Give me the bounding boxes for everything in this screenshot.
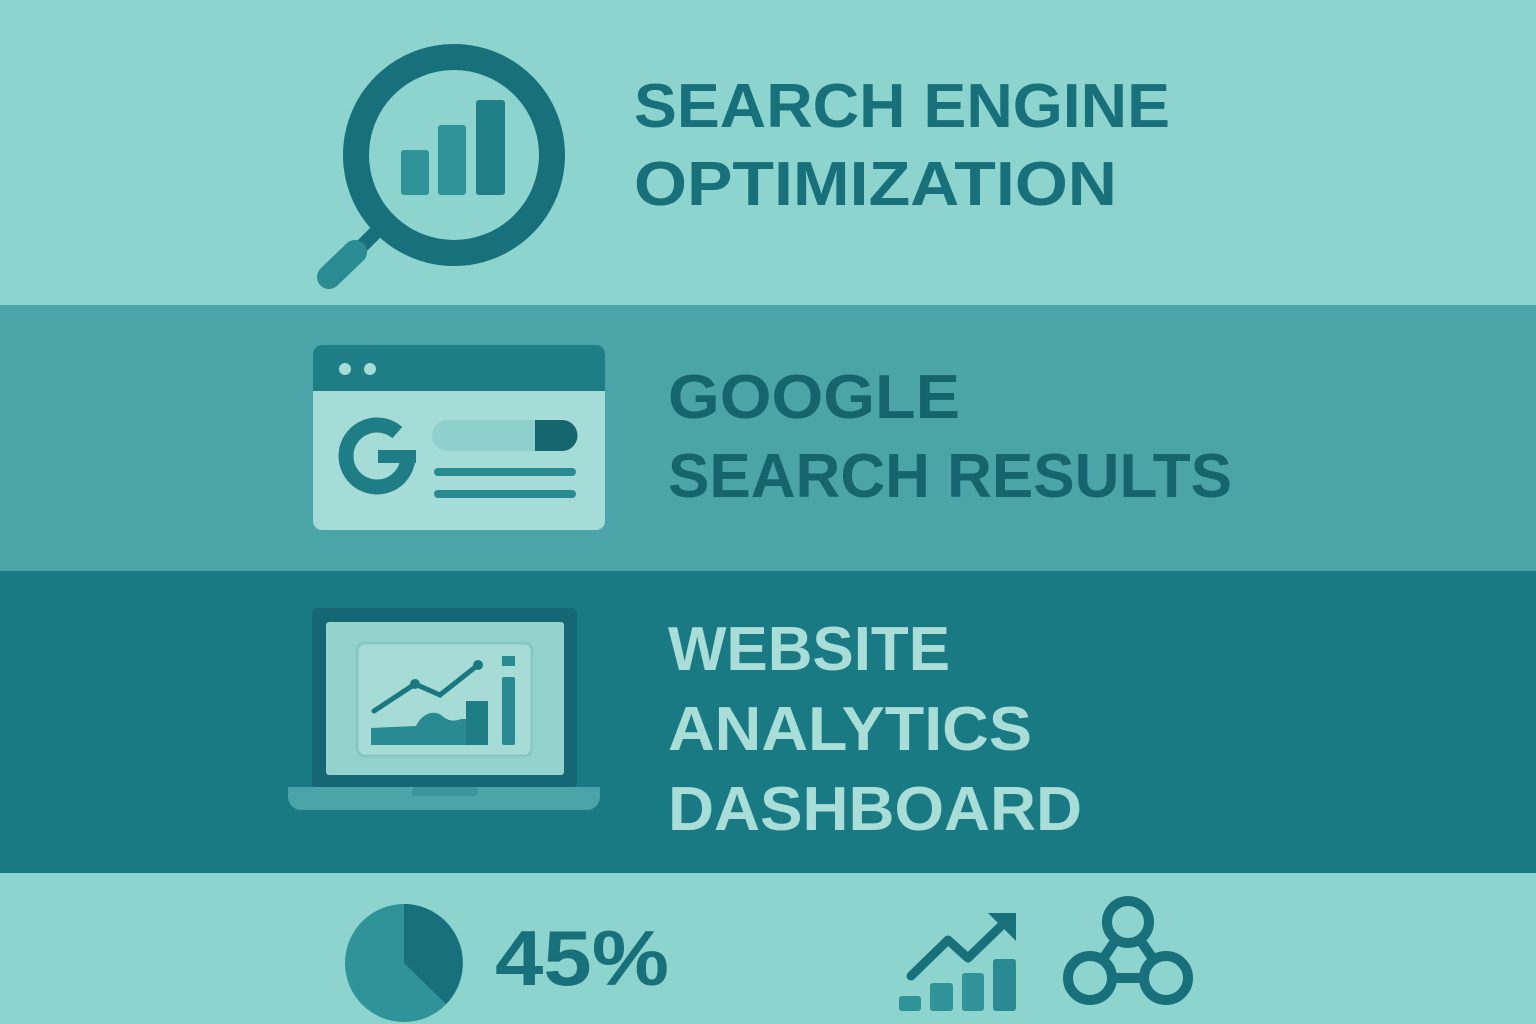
title: SEO: SEARCH ENGINE (634, 72, 1170, 141)
stat: 45%: 45% (495, 914, 669, 1002)
icon: magnifier (329, 57, 552, 277)
title: analytics (668, 615, 1082, 844)
chart: pie (345, 904, 463, 1022)
icon: laptop dashboard (288, 608, 600, 810)
title: SEO: OPTIMIZATION (634, 150, 1117, 219)
band: google (0, 305, 1536, 571)
band: analytics (0, 571, 1536, 873)
title: google (668, 363, 1232, 511)
icon: network (1068, 901, 1188, 1000)
band: stats (0, 873, 1536, 1024)
icon: growth chart (899, 913, 1016, 1011)
band: SEO (0, 0, 1536, 305)
title: analytics: WEBSITE (668, 615, 950, 684)
title: analytics: ANALYTICS (668, 695, 1032, 764)
title: SEO (634, 72, 1170, 219)
title: analytics: DASHBOARD (668, 775, 1082, 844)
title: google: GOOGLE (668, 363, 960, 432)
title: google: SEARCH RESULTS (668, 442, 1232, 511)
icon: browser google (313, 345, 605, 530)
